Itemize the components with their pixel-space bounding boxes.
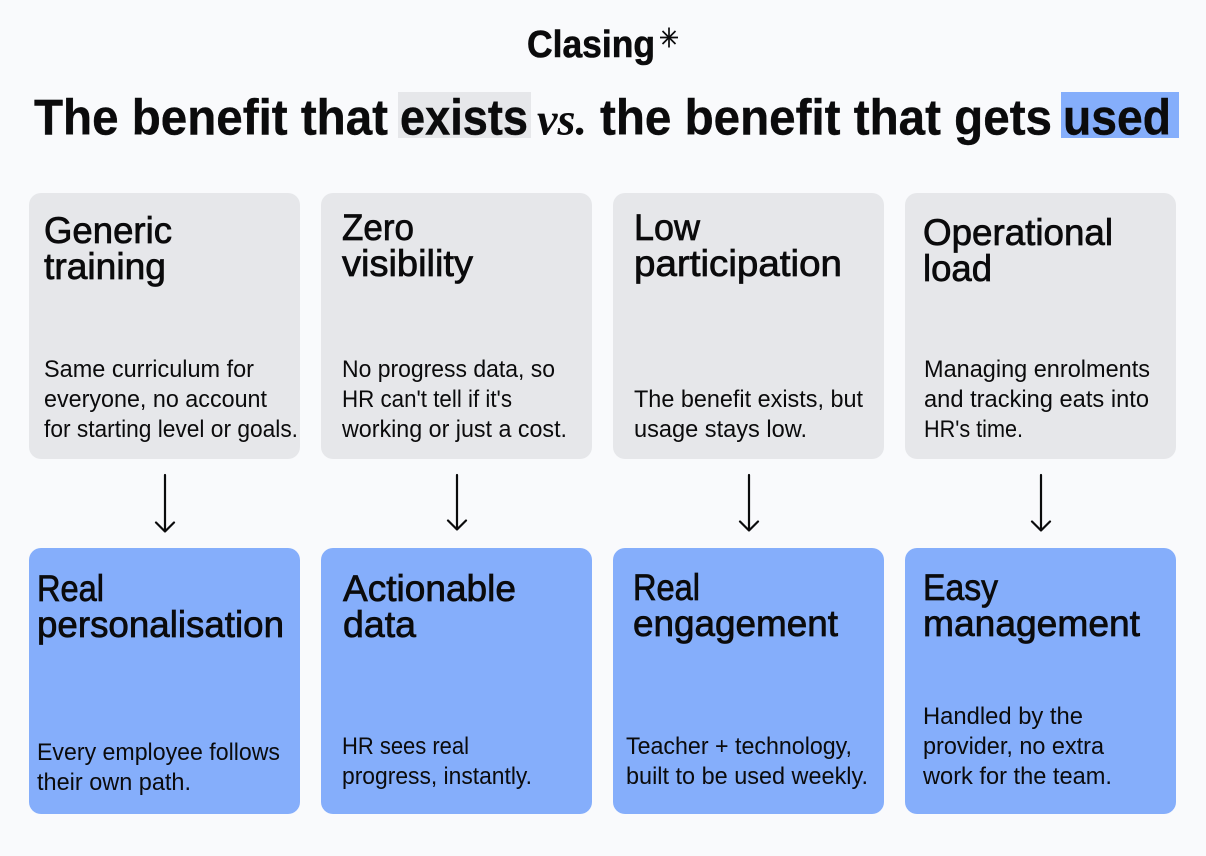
panel: easy management: provider, no extra: [923, 733, 1105, 760]
arrow: zero visibility to actionable data: [448, 475, 466, 530]
title: The benefit that: [34, 90, 388, 146]
panel: generic training: training: [44, 246, 166, 287]
arrow: operational load to easy management: [1032, 475, 1050, 530]
title: [34, 90, 1179, 146]
panel: zero visibility: Zero: [342, 207, 414, 248]
panel: real engagement: built to be used weekly.: [626, 763, 868, 790]
panel: operational load: HR's time.: [924, 416, 1023, 443]
panel: real personalisation: personalisation: [37, 604, 284, 645]
panel: real personalisation: [29, 548, 300, 814]
panel: low participation: participation: [634, 243, 842, 284]
logo: Clasing: Clasing: [527, 24, 655, 66]
panel: low participation: usage stays low.: [634, 416, 807, 443]
panel: low participation: Low: [634, 207, 700, 248]
panel: real personalisation: Every employee follows: [37, 739, 280, 766]
panel: real engagement: engagement: [633, 603, 839, 644]
panel: real personalisation: their own path.: [37, 769, 191, 796]
icon: logo asterisk: [660, 28, 678, 48]
panel: low participation: [613, 193, 884, 459]
panel: operational load: Operational: [923, 212, 1113, 253]
panel: easy management: management: [923, 603, 1141, 644]
panel: generic training: [29, 193, 300, 459]
panel: operational load: and tracking eats into: [924, 386, 1149, 413]
panel: actionable data: Actionable: [343, 568, 516, 609]
panel: real engagement: Real: [633, 567, 700, 608]
panel: easy management: [905, 548, 1176, 814]
panel: operational load: load: [923, 248, 992, 289]
panel: real engagement: [613, 548, 884, 814]
panel: actionable data: HR sees real: [342, 733, 469, 760]
panel: generic training: for starting level or goals.: [44, 416, 298, 443]
panel: zero visibility: [321, 193, 592, 459]
panel: easy management: Handled by the: [923, 703, 1083, 730]
panel: actionable data: [321, 548, 592, 814]
panel: low participation: The benefit exists, but: [634, 386, 863, 413]
panel: zero visibility: visibility: [342, 243, 474, 284]
panel: generic training: everyone, no account: [44, 386, 267, 413]
title: vs.: [537, 94, 587, 144]
panel: operational load: [905, 193, 1176, 459]
title: exists: [400, 90, 528, 146]
panel: generic training: Same curriculum for: [44, 356, 254, 383]
panel: easy management: Easy: [923, 567, 998, 608]
panel: actionable data: data: [343, 604, 416, 645]
arrow: generic training to real personalisation: [156, 475, 174, 532]
panel: easy management: work for the team.: [922, 763, 1112, 790]
arrow: low participation to real engagement: [740, 475, 758, 530]
panel: real personalisation: Real: [37, 568, 104, 609]
title: used: [1063, 90, 1171, 146]
title: the benefit that gets: [600, 90, 1052, 146]
panel: actionable data: progress, instantly.: [342, 763, 532, 790]
panel: real engagement: Teacher + technology,: [626, 733, 852, 760]
panel: zero visibility: No progress data, so: [342, 356, 555, 383]
panel: zero visibility: HR can't tell if it's: [342, 386, 512, 413]
panel: operational load: Managing enrolments: [924, 356, 1150, 383]
panel: generic training: Generic: [44, 210, 172, 251]
panel: zero visibility: working or just a cost.: [341, 416, 567, 443]
